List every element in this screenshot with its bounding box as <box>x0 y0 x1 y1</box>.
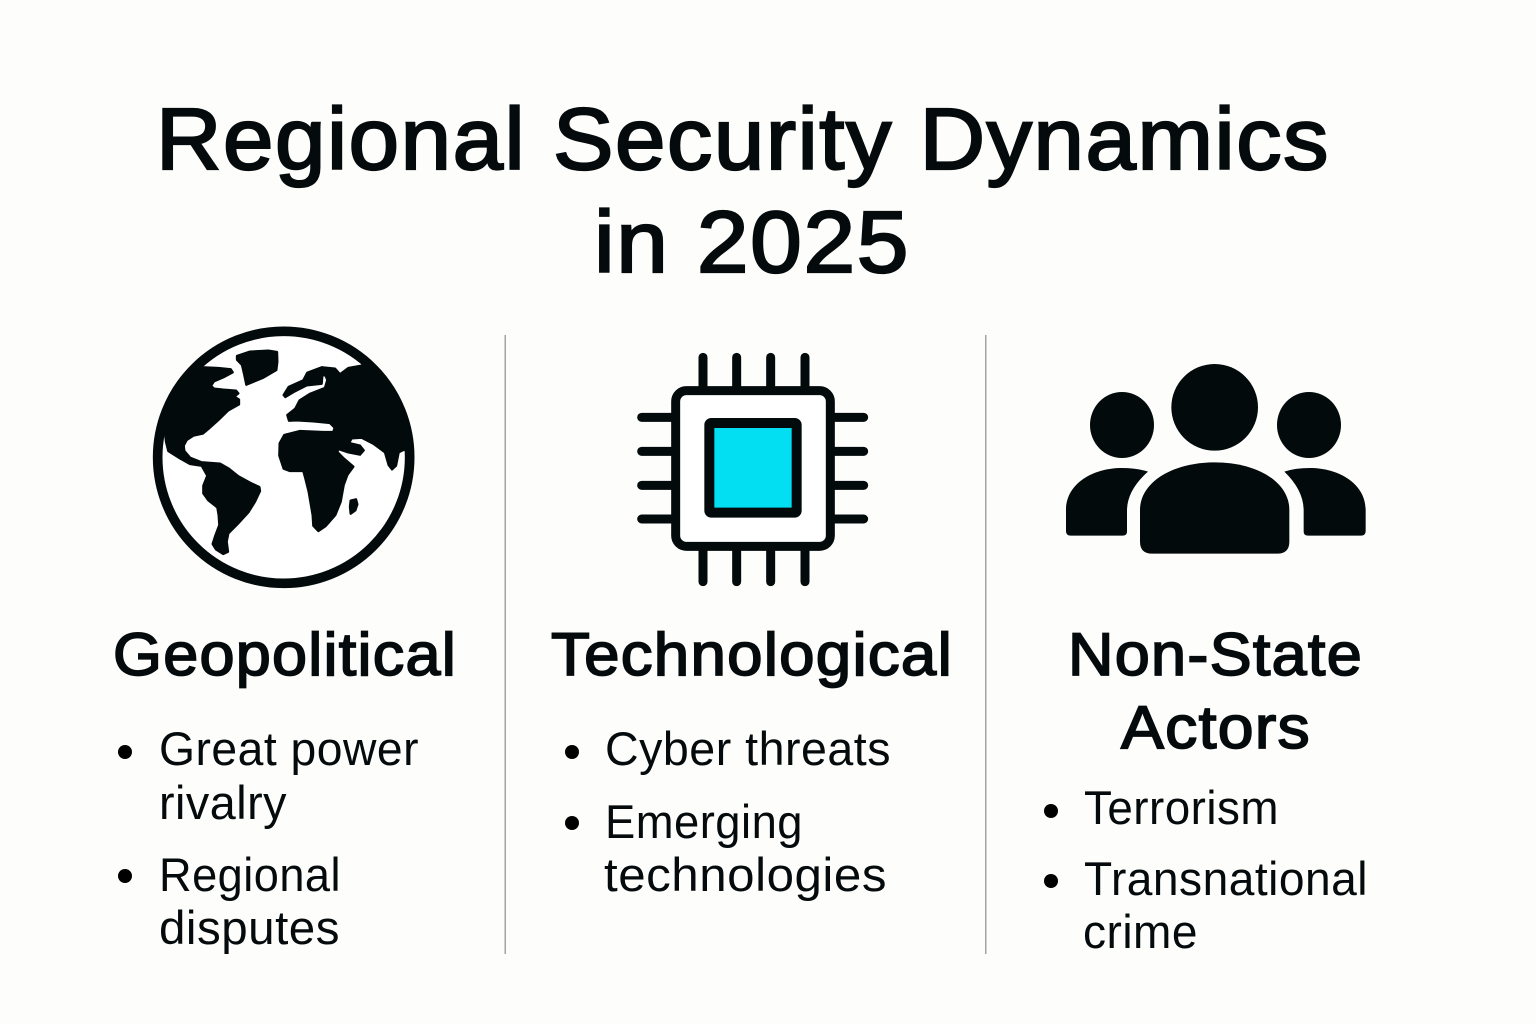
bullet list: non-state actors: Terrorism <box>1084 781 1279 834</box>
icon: microchip <box>642 357 864 582</box>
bullet list: geopolitical: Regional <box>159 848 341 901</box>
bullet list: non-state actors: Transnational <box>1084 852 1368 905</box>
bullet list: geopolitical: Great power <box>159 722 419 775</box>
panel: non-state actors <box>1044 364 1368 958</box>
panel: technological <box>551 357 953 901</box>
bullet list: geopolitical: rivalry <box>159 776 287 829</box>
icon: globe <box>147 331 423 583</box>
heading: non-state actors: Actors <box>1121 694 1311 761</box>
panel: geopolitical <box>113 331 457 954</box>
title: in 2025 <box>594 194 910 291</box>
bullet list: geopolitical: disputes <box>159 901 340 954</box>
bullet list: non-state actors: crime <box>1083 905 1198 958</box>
bullet list: technological <box>565 722 891 901</box>
icon: people <box>1066 364 1366 554</box>
heading: non-state actors <box>1068 621 1363 761</box>
title: Regional Security Dynamics <box>156 91 1330 188</box>
bullet list: geopolitical <box>118 722 419 954</box>
bullet list: technological: Emerging <box>605 795 803 848</box>
bullet list: non-state actors <box>1044 781 1368 958</box>
bullet list: technological: technologies <box>604 848 887 901</box>
heading: technological: Technological <box>551 621 953 688</box>
title <box>156 91 1330 291</box>
heading: geopolitical: Geopolitical <box>113 621 457 688</box>
bullet list: technological: Cyber threats <box>605 722 891 775</box>
heading: non-state actors: Non-State <box>1068 621 1363 688</box>
